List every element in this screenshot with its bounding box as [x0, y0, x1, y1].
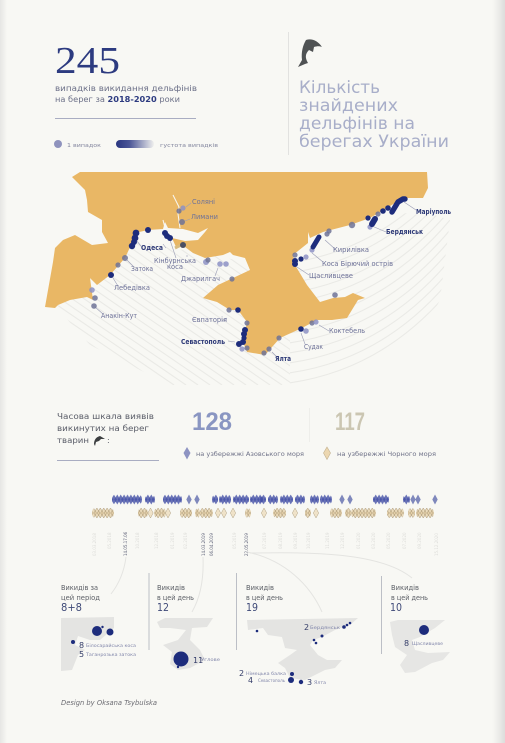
- place names: [101, 198, 451, 363]
- panel number: 19: [246, 601, 258, 614]
- dots: [174, 652, 188, 668]
- panel: day 10: Щасливцеве: [412, 641, 443, 647]
- place names: Одеса: [141, 244, 163, 252]
- labels: 2: [304, 623, 309, 632]
- panel: day 12: [157, 584, 220, 670]
- legend: density label: густота випадків: [160, 143, 218, 149]
- Azov row: [112, 494, 438, 504]
- map of the Ukrainian coast: [45, 172, 451, 363]
- dots: [71, 626, 114, 644]
- date axis: 05.2018: [107, 532, 112, 549]
- panel: period 8+8: Білосарайська коса: [86, 642, 136, 649]
- panel: period 8+8: Таганрозька затока: [85, 652, 136, 658]
- title: [299, 78, 449, 152]
- place names: Євпаторія: [192, 316, 227, 324]
- date axis: 10.2018: [135, 532, 140, 549]
- dots: [256, 622, 351, 684]
- statistic caption line two: на берег за 2018-2020 роки: [55, 95, 180, 104]
- Azov label: на узбережжі Азовського моря: [196, 451, 304, 458]
- date axis: 05.2020: [386, 532, 391, 549]
- Black sea count: 117: [335, 408, 365, 436]
- date axis: 14.03.2019: [201, 533, 206, 556]
- place names: Коктебель: [329, 327, 365, 335]
- Azov diamond: [184, 447, 190, 460]
- legend: single case label: 1 випадок: [67, 143, 102, 149]
- coast dots Crimea: [226, 292, 338, 356]
- date axis: 11.2019: [325, 532, 330, 549]
- mini map: [247, 618, 358, 680]
- panel heading: Викидів: [246, 584, 274, 592]
- panel number: 8+8: [61, 601, 82, 614]
- date axis: 02.2019: [183, 532, 188, 549]
- date axis: 09.2020: [417, 532, 422, 549]
- date axis: 01.2020: [356, 532, 361, 549]
- panel: day 19: 4: [248, 676, 253, 685]
- credit: Design by Oksana Tsybulska: [61, 699, 157, 707]
- place names: Ялта: [275, 355, 291, 363]
- date axis: 01.2019: [170, 532, 175, 549]
- place names: Кирилівка: [333, 246, 369, 254]
- timeline heading: Часова шкала виявів: [57, 412, 154, 421]
- timeline heading: тварин: [57, 436, 89, 445]
- panel heading: Викидів за: [61, 584, 98, 592]
- panel: period 8+8: 5: [79, 650, 84, 659]
- panel: day 19: Севастополь: [258, 678, 285, 684]
- date axis: 12.2018: [154, 532, 159, 549]
- labels: 8: [404, 639, 409, 648]
- date axis: 09.2019: [293, 532, 298, 549]
- connector curves: [111, 552, 412, 612]
- Black sea label: на узбережжі Чорного моря: [337, 451, 436, 458]
- leader lines: [95, 202, 416, 357]
- place names: Судак: [304, 343, 323, 351]
- panel: day 19: Бердянськ: [310, 625, 340, 631]
- Black sea row: [92, 508, 434, 518]
- date axis: 12.2019: [340, 532, 345, 549]
- legend: density gradient: [116, 140, 154, 148]
- date axis: 15.12.2020: [434, 533, 439, 556]
- date axis: 05.2019: [232, 532, 237, 549]
- place names: Кінбурнська: [154, 257, 196, 265]
- labels: 11: [193, 656, 203, 665]
- place names: Затока: [131, 265, 153, 273]
- date axis: 07.2020: [402, 532, 407, 549]
- Black sea diamond: [324, 447, 330, 460]
- place names: Маріуполь: [416, 208, 451, 216]
- place names: Бердянськ: [386, 228, 423, 236]
- title: знайдених: [299, 96, 398, 116]
- number 245: 245: [55, 40, 120, 82]
- panel heading: Викидів: [391, 584, 419, 592]
- timeline chart: [92, 494, 439, 556]
- place names: Джарилгач: [181, 275, 220, 283]
- panel: day 19: 2: [239, 669, 244, 678]
- date axis: 03.03.2018: [92, 533, 97, 556]
- tan spit: [175, 244, 183, 248]
- place names: Лебедівка: [114, 284, 150, 292]
- place names: Севастополь: [181, 338, 225, 346]
- panel: period 8+8: [61, 584, 136, 671]
- date axis: [92, 531, 439, 556]
- dot: [419, 625, 429, 635]
- place names: Коса Бірючий острів: [322, 260, 393, 268]
- panel number: 12: [157, 601, 169, 614]
- date axis: 07.2019: [262, 532, 267, 549]
- place names: Щасливцеве: [309, 272, 353, 280]
- panel: day 19: в цей день: [246, 594, 283, 602]
- panel: day 12: в цей день: [157, 594, 194, 602]
- timeline heading: викинутих на берег: [57, 424, 149, 433]
- date axis: 22.05.2019: [244, 533, 249, 556]
- title: берегах України: [299, 132, 449, 152]
- panel: day 19: Ялта: [314, 680, 326, 686]
- land: [45, 172, 428, 355]
- mini map: [390, 620, 450, 673]
- place names: Соляні: [192, 198, 215, 206]
- timeline legend: [184, 447, 436, 460]
- panel: day 10: [390, 584, 450, 673]
- title: дельфінів на: [299, 114, 415, 134]
- panel: period 8+8: цей період: [61, 594, 100, 602]
- panel: day 19: 3: [307, 678, 312, 687]
- coast dots Azov: [292, 199, 405, 267]
- title: Кількість: [299, 78, 380, 98]
- timeline heading: [57, 412, 154, 446]
- icon: small dolphin: [94, 436, 105, 446]
- timeline heading: :: [107, 436, 110, 445]
- headline statistic: [55, 40, 197, 104]
- date axis: 06.04.2019: [209, 533, 214, 556]
- coast dots west: [89, 205, 235, 309]
- icon: dolphin: [298, 39, 322, 67]
- date axis: 14.05.17.06: [123, 531, 128, 556]
- Azov sea count: 128: [192, 408, 232, 436]
- statistic caption: випадків викидання дельфінів: [55, 84, 197, 93]
- date axis: 03.2020: [371, 532, 376, 549]
- legend: [54, 140, 218, 149]
- place names: коса: [167, 263, 183, 271]
- mini map: [157, 618, 213, 670]
- mini map: [61, 617, 114, 671]
- place names: Лимани: [191, 213, 218, 221]
- legend: single case dot: [54, 140, 62, 148]
- panel heading: Викидів: [157, 584, 185, 592]
- sea wave pattern: [58, 212, 450, 385]
- place names: Анакін-Кут: [101, 312, 137, 320]
- panel: day 19: [239, 584, 358, 687]
- panel: day 19: Німецька балка: [246, 671, 286, 677]
- panel: day 10: в цей день: [391, 594, 428, 602]
- date axis: 08.2019: [278, 532, 283, 549]
- panel: day 12: Углове: [201, 657, 220, 663]
- liman streams: [163, 195, 180, 228]
- panel number: 10: [390, 601, 402, 614]
- date axis: 10.2019: [306, 532, 311, 549]
- labels: 8: [79, 641, 84, 650]
